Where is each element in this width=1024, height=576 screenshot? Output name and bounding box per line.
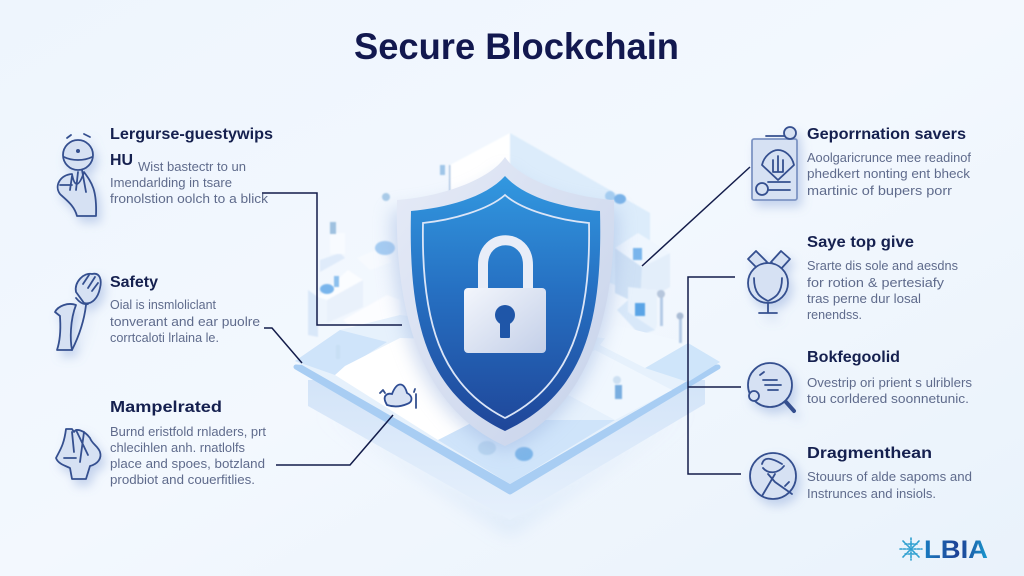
background building	[308, 133, 670, 337]
icon: raised hands	[55, 274, 101, 350]
icon: fist	[56, 429, 101, 479]
panel: right item 1	[752, 126, 971, 200]
text block: for rotion & pertesiafy	[807, 275, 945, 290]
text block: Burnd eristfold rnladers, prt	[110, 424, 266, 439]
panel: right item 3	[748, 349, 973, 411]
connector lines	[262, 167, 750, 474]
panel: left item 2	[55, 274, 260, 350]
text block: Aoolgaricrunce mee readinof	[807, 150, 971, 165]
text block	[807, 375, 973, 406]
heading: Bokfegoolid	[807, 349, 900, 366]
shield face	[411, 176, 600, 431]
small node figures	[320, 165, 684, 461]
icon: medal with ribbons	[748, 251, 790, 313]
text block: Srarte dis sole and aesdns	[807, 258, 958, 273]
text block: place and spoes, botzland	[110, 456, 265, 471]
panel: left item 3	[56, 399, 266, 487]
title: Secure Blockchain	[354, 26, 679, 67]
text block: chlecihlen anh. rnatlolfs	[110, 440, 245, 455]
text block: martinic of bupers porr	[807, 183, 953, 198]
logo	[900, 536, 988, 564]
panel: right item 2	[748, 234, 958, 322]
icon: magnifier	[748, 363, 794, 411]
text block	[807, 469, 972, 501]
text block: HU	[110, 152, 133, 169]
text block: Stouurs of alde sapoms and	[807, 469, 972, 484]
icon: head and hand	[58, 134, 96, 216]
text block: phedkert nonting ent bheck	[807, 166, 971, 181]
logo wordmark: LBIA	[924, 536, 988, 564]
platform body	[295, 315, 720, 520]
shield rim	[397, 157, 614, 446]
text block	[110, 297, 260, 345]
text block	[807, 150, 971, 198]
text block: Ovestrip ori prient s ulriblers	[807, 375, 973, 390]
heading: Mampelrated	[110, 399, 222, 416]
panel: left item 1	[58, 126, 273, 216]
central illustration: isometric platform and shield	[295, 133, 720, 535]
text block: renendss.	[807, 307, 862, 322]
heading: Lergurse-guestywips	[110, 126, 273, 143]
text block	[110, 424, 266, 487]
platform shadow	[320, 410, 690, 535]
heading: Saye top give	[807, 234, 914, 251]
text block: fronolstion oolch to a blick	[110, 191, 269, 206]
text block: tras perne dur losal	[807, 291, 921, 306]
icon: padlock	[464, 240, 546, 353]
heading: Safety	[110, 274, 158, 291]
shield glow	[392, 170, 618, 452]
text block: Imendarlding in tsare	[110, 175, 232, 190]
shield inner line	[423, 195, 589, 418]
text block: tonverant and ear puolre	[110, 314, 260, 329]
text block: Oial is insmloliclant	[110, 297, 216, 312]
icon: cloud on platform	[380, 384, 416, 408]
icon: hourglass figure	[750, 453, 796, 499]
text block: prodbiot and couerfitlies.	[110, 472, 255, 487]
text block: Wist bastectr to un	[138, 159, 246, 174]
text block: corrtcaloti lrlaina le.	[110, 330, 219, 345]
text block: Instrunces and insiols.	[807, 486, 936, 501]
heading: Geporrnation savers	[807, 126, 966, 143]
text block	[807, 258, 958, 322]
text block: tou corldered soonnetunic.	[807, 391, 969, 406]
icon: document with gears	[752, 127, 797, 200]
panel: right item 4	[750, 445, 972, 501]
text block	[110, 152, 269, 206]
shield	[392, 157, 618, 452]
icon: logo snowflake	[900, 538, 922, 560]
heading: Dragmenthean	[807, 445, 932, 462]
